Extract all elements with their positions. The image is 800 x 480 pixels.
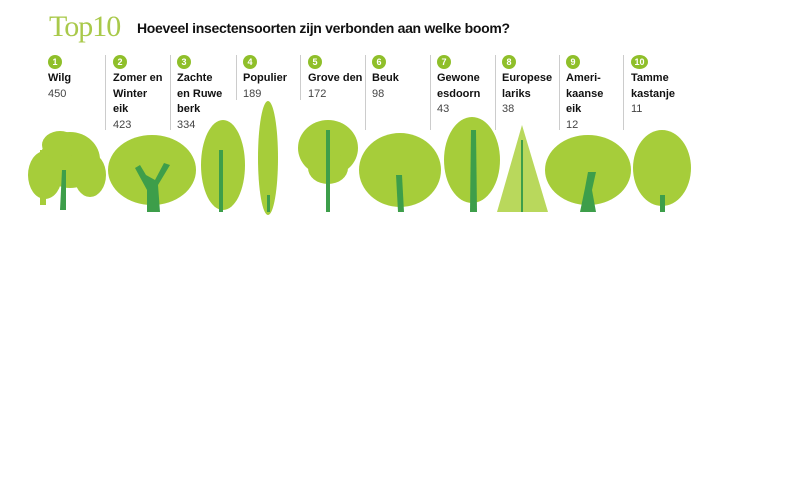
item 5: 172 xyxy=(308,88,326,100)
item 1: Wilg xyxy=(48,72,71,84)
item 10: Tamme kastanje xyxy=(631,72,675,100)
item 4: 189 xyxy=(243,88,261,100)
item 3 xyxy=(177,55,222,130)
item 4: Populier xyxy=(243,72,287,84)
tree 6 beech xyxy=(359,133,441,212)
subtitle: Hoeveel insectensoorten zijn verbonden aan welke boom? xyxy=(137,20,510,36)
tree 7 maple xyxy=(444,117,500,212)
tree 8 larch xyxy=(497,125,548,212)
item 3: 334 xyxy=(177,118,195,130)
item 7: 7 xyxy=(441,57,446,67)
tree 4 poplar xyxy=(258,101,278,215)
tree 5 pine xyxy=(298,120,358,212)
item 4: 4 xyxy=(247,57,252,67)
tree 9 red oak xyxy=(545,135,631,212)
item 6: 6 xyxy=(376,57,382,67)
item 10: 11 xyxy=(631,103,642,115)
item 8 xyxy=(502,55,552,115)
tree 3 birch xyxy=(201,120,245,212)
item 6: 98 xyxy=(372,88,384,100)
item 2: 423 xyxy=(113,118,131,130)
item 4 xyxy=(243,55,287,100)
item 6: Beuk xyxy=(372,72,399,84)
item 6 xyxy=(372,55,399,100)
item 1: 450 xyxy=(48,88,66,100)
item 7: 43 xyxy=(437,103,449,115)
item 3: 3 xyxy=(181,57,186,67)
item 8: 38 xyxy=(502,103,514,115)
tree 10 chestnut xyxy=(633,130,691,212)
item 10 xyxy=(631,55,675,115)
item 8: 8 xyxy=(506,57,512,67)
item 2: Zomer en Winter eik xyxy=(113,72,163,115)
item 8: Europese lariks xyxy=(502,72,552,100)
item 5: Grove den xyxy=(308,72,362,84)
tree 1 willow xyxy=(28,131,106,210)
item 10: 10 xyxy=(634,57,644,67)
item 5 xyxy=(308,55,362,100)
item 3: Zachte en Ruwe berk xyxy=(177,72,222,115)
tree 2 oak xyxy=(108,135,196,212)
item 1 xyxy=(48,55,71,100)
item 9: 9 xyxy=(570,57,576,67)
title: Top10 xyxy=(49,10,120,43)
item 2 xyxy=(113,55,163,130)
item 9 xyxy=(566,55,603,130)
item 7: Gewone esdoorn xyxy=(437,72,480,100)
item 9: Ameri-kaanse eik xyxy=(566,72,603,115)
item 1: 1 xyxy=(52,57,58,67)
item 2: 2 xyxy=(117,57,122,67)
item 7 xyxy=(437,55,480,115)
item 5: 5 xyxy=(312,57,318,67)
item 9: 12 xyxy=(566,118,578,130)
